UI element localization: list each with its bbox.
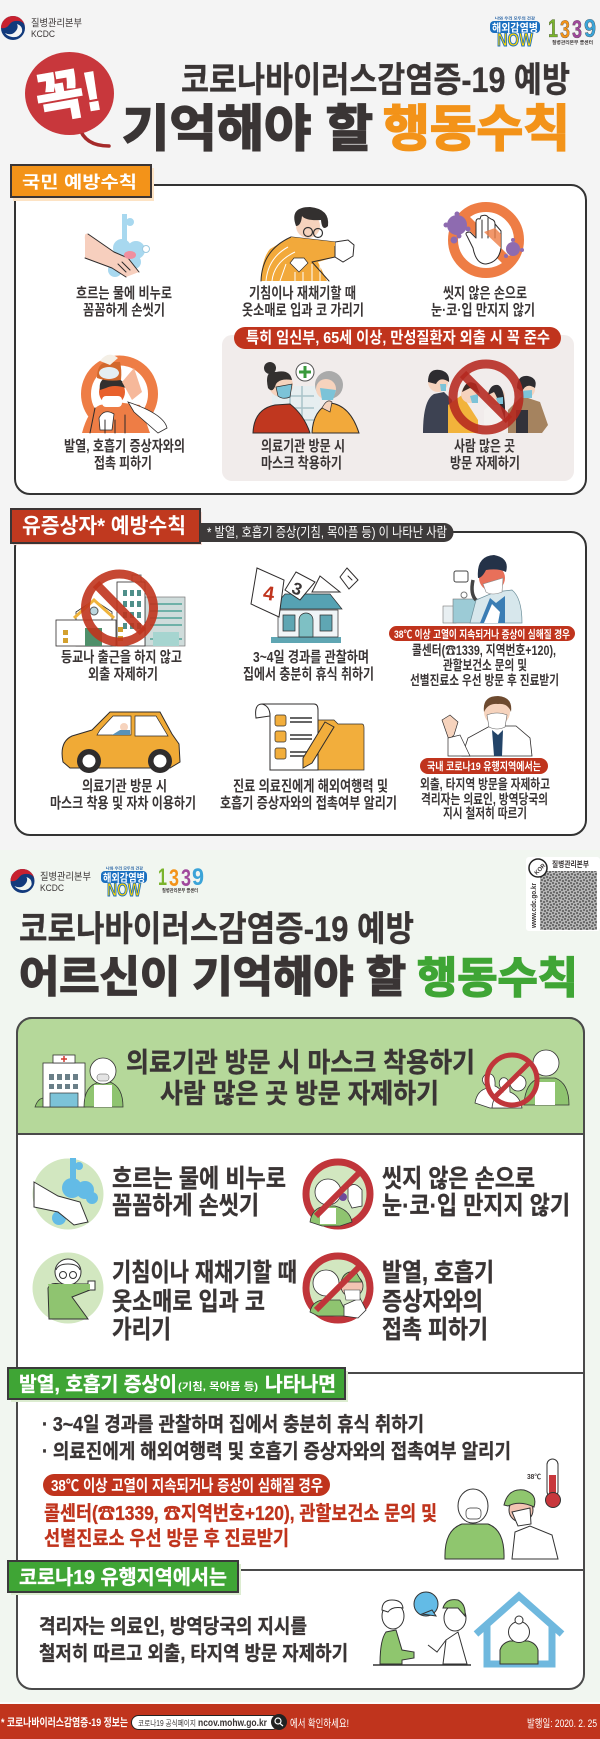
divider and heading tab: epidemic regions	[8, 1561, 584, 1595]
caption: wear mask at hospital: 의료기관 방문 시	[261, 438, 345, 455]
footer url pill	[132, 1714, 287, 1730]
panel heading tab: contacts	[11, 509, 202, 545]
icon: no crowd elderly	[475, 1050, 569, 1108]
icon: hospital and elderly woman	[35, 1055, 123, 1107]
red pill: epidemic regions	[420, 758, 548, 774]
KCDC logo lower	[10, 869, 91, 894]
1339 logo lower: 질병관리본부 콜센터	[162, 887, 198, 894]
caption: tell medical staff	[220, 778, 397, 812]
caption: mask and own car: 마스크 착용 및 자차 이용하기	[50, 795, 196, 812]
icon: calendar and house: 4	[262, 582, 277, 606]
caption: mask and own car	[50, 778, 196, 812]
caption: stay home	[61, 649, 182, 683]
1339 logo lower: 3	[169, 865, 179, 892]
QR code block: www.cdc.go.kr	[529, 883, 538, 929]
item text: avoid contact: 발열, 호흡기	[382, 1259, 494, 1287]
icon circle: no touching	[306, 1162, 370, 1226]
caption: epidemic region rules	[420, 777, 550, 821]
overseas infection NOW logo lower: 나와 우리 모두의 건강	[106, 866, 144, 870]
1339 logo lower: 1	[158, 864, 167, 891]
sub-panel: high risk groups	[222, 327, 574, 481]
item text: no touching	[382, 1165, 570, 1220]
1339 logo lower: 9	[192, 864, 204, 891]
KCDC logo lower: 질병관리본부	[40, 871, 91, 883]
bullet list: · 의료진에게 해외여행력 및 호흡기 증상자와의 접촉여부 알리기	[42, 1440, 511, 1463]
caption: epidemic region rules: 외출, 타지역 방문을 자제하고	[420, 777, 550, 792]
1339 call center logo top: 3	[560, 16, 570, 44]
caption: cover cough: 옷소매로 입과 코 가리기	[242, 302, 364, 319]
red pill: high fever: 38℃ 이상 고열이 지속되거나 증상이 심해질 경우	[51, 1477, 323, 1495]
caption: epidemic region rules: 격리자는 의료인, 방역당국의	[421, 792, 548, 807]
1339 call center logo top: 3	[572, 16, 582, 44]
overseas infection NOW logo top: NOW	[497, 30, 533, 50]
icon: crowd prohibited	[423, 364, 548, 433]
item text: avoid contact: 증상자와의	[382, 1288, 483, 1316]
icon: yellow car	[62, 712, 180, 773]
footer url pill: 코로나19 공식페이지	[138, 1718, 196, 1728]
item text: cover cough	[112, 1259, 297, 1344]
caption: stay home: 등교나 출근을 하지 않고	[61, 649, 182, 666]
caption: epidemic region rules: 지시 철저히 따르기	[443, 806, 527, 821]
overseas infection NOW logo top: 해외감염병	[492, 20, 538, 34]
red call center text: 선별진료소 우선 방문 후 진료받기	[44, 1527, 289, 1550]
caption: do not touch face	[431, 285, 535, 319]
overseas infection NOW logo top: 나와 우리 모두의 건강	[495, 16, 536, 20]
1339 logo lower	[158, 864, 204, 894]
footer check text: 에서 확인하세요!	[290, 1716, 349, 1730]
icon: doctor on phone	[443, 555, 522, 623]
caption: wash hands	[76, 285, 172, 319]
green header of panel	[17, 1018, 584, 1134]
panel heading tab: public	[11, 165, 154, 201]
red pill: epidemic regions: 국내 코로나19 유행지역에서는	[427, 759, 541, 773]
item text: no touching: 씻지 않은 손으로	[382, 1165, 535, 1193]
icon: checklist and folder	[256, 704, 364, 770]
divider and heading tab: fever symptoms	[8, 1368, 584, 1402]
caption: avoid contact	[64, 438, 185, 472]
caption: avoid crowds: 사람 많은 곳	[454, 438, 515, 455]
icon: calendar and house	[251, 568, 358, 643]
caption: wear mask at hospital	[261, 438, 345, 472]
item text: no touching: 눈·코·입 만지지 않기	[382, 1192, 570, 1220]
lower title line two: 어르신이 기억해야 할	[19, 954, 406, 1002]
red stamp badge: 꼭!	[31, 61, 106, 131]
1339 call center logo top	[548, 15, 596, 46]
red pill: high risk notice	[234, 327, 561, 349]
caption: avoid contact: 접촉 피하기	[94, 455, 152, 472]
icon: doctor in white coat	[442, 696, 532, 756]
KCDC logo top: KCDC	[31, 29, 55, 40]
title line two: 행동수칙	[383, 101, 570, 157]
note pill: symptom definition: * 발열, 호흡기 증상(기침, 목아픔 등) 이 나타난 사람	[207, 525, 447, 540]
icon: calendar and house: 3	[289, 579, 305, 600]
footer info text: * 코로나바이러스감염증-19 정보는	[1, 1715, 128, 1729]
red pill: high fever	[43, 1474, 330, 1496]
item text: cover cough: 기침이나 재채기할 때	[112, 1259, 297, 1287]
panel heading tab: public: 국민 예방수칙	[22, 173, 137, 192]
icon circle: cough into sleeve	[32, 1252, 104, 1324]
icon: do not touch with unwashed hands	[444, 207, 524, 273]
bullet list	[42, 1413, 511, 1463]
1339 call center logo top: 질병관리본부 콜센터	[552, 39, 593, 46]
caption: do not touch face: 눈·코·입 만지지 않기	[431, 302, 535, 319]
item text: avoid contact: 접촉 피하기	[382, 1316, 488, 1344]
divider and heading tab: fever symptoms: (기침, 목아픔 등)	[178, 1380, 258, 1393]
note pill: symptom definition	[200, 523, 454, 542]
caption: call center instructions: 콜센터(☎1339, 지역번호+120),	[412, 643, 556, 658]
KCDC logo top	[1, 16, 82, 40]
quarantine text: 격리자는 의료인, 방역당국의 지시를	[39, 1615, 307, 1638]
caption: avoid contact: 발열, 호흡기 증상자와의	[64, 438, 185, 455]
caption: wash hands: 흐르는 물에 비누로	[76, 285, 172, 302]
item text: avoid contact	[382, 1259, 494, 1344]
divider and heading tab: fever symptoms: 발열, 호흡기 증상이	[19, 1373, 177, 1396]
icon circle: handwashing	[32, 1158, 104, 1230]
red call center text	[44, 1502, 437, 1550]
title line two	[122, 101, 570, 157]
caption: wash hands: 꼼꼼하게 손씻기	[83, 302, 165, 319]
overseas infection NOW logo lower: 해외감염병	[103, 870, 145, 884]
caption: avoid crowds	[450, 438, 520, 472]
caption: rest at home: 3~4일 경과를 관찰하며	[253, 649, 369, 666]
icon circle: avoid contact	[306, 1256, 370, 1320]
caption: stay home: 외출 자제하기	[88, 666, 158, 683]
caption: do not touch face: 씻지 않은 손으로	[443, 285, 527, 302]
divider and heading tab: fever symptoms: 나타나면	[265, 1373, 336, 1396]
illustration: fever patient and thermometer: 38℃	[527, 1473, 541, 1481]
header text: 의료기관 방문 시 마스크 착용하기	[126, 1048, 475, 1078]
quarantine text: 철저히 따르고 외출, 타지역 방문 자제하기	[39, 1642, 348, 1665]
footer url pill: ncov.mohw.go.kr	[198, 1718, 267, 1729]
icon: hand washing	[85, 214, 150, 277]
item text: wash hands: 흐르는 물에 비누로	[112, 1165, 286, 1193]
panel: elderly rules	[8, 1018, 584, 1689]
caption: tell medical staff: 호흡기 증상자와의 접촉여부 알리기	[220, 795, 397, 812]
lower title line one: 코로나바이러스감염증-19 예방	[19, 910, 414, 949]
panel: contacts prevention rules	[11, 509, 586, 835]
caption: cover cough: 기침이나 재채기할 때	[249, 285, 356, 302]
header text	[126, 1048, 475, 1109]
caption: rest at home	[243, 649, 374, 683]
icon: masked women at hospital	[253, 362, 359, 433]
illustration: elderly at home	[476, 1596, 562, 1664]
icon: avoid contact with feverish person	[82, 355, 167, 433]
overseas infection NOW logo top	[490, 16, 540, 50]
QR code block	[526, 857, 600, 931]
QR code block: KOR	[534, 863, 548, 876]
illustration: fever patient and thermometer	[445, 1459, 560, 1559]
item text: cover cough: 가리기	[112, 1316, 171, 1344]
title line two: 기억해야 할	[122, 101, 373, 157]
1339 logo lower: 3	[181, 865, 191, 892]
lower title line two	[19, 954, 578, 1003]
overseas infection NOW logo lower: NOW	[107, 880, 141, 900]
quarantine text	[39, 1615, 348, 1665]
caption: cover cough	[242, 285, 364, 319]
caption: call center instructions: 선별진료소 우선 방문 후 진료받기	[410, 673, 559, 688]
illustration: doctor consultation	[373, 1592, 471, 1665]
overseas infection NOW logo lower	[101, 866, 147, 900]
QR code block: 질병관리본부	[552, 859, 590, 869]
lower title line two: 행동수칙	[417, 955, 578, 1003]
icon: man coughing into sleeve	[261, 207, 354, 281]
icon: stay home instead of school or work	[56, 574, 185, 646]
caption: rest at home: 집에서 충분히 휴식 취하기	[243, 666, 374, 683]
item text: wash hands: 꼼꼼하게 손씻기	[112, 1192, 259, 1220]
red pill: high risk notice: 특히 임신부, 65세 이상, 만성질환자 외출 시 꼭 준수	[246, 329, 550, 347]
1339 call center logo top: 9	[584, 15, 596, 43]
caption: wear mask at hospital: 마스크 착용하기	[261, 455, 342, 472]
divider and heading tab: epidemic regions: 코로나19 유행지역에서는	[19, 1566, 227, 1589]
bullet list: · 3~4일 경과를 관찰하며 집에서 충분히 휴식 취하기	[42, 1413, 424, 1436]
item text: cover cough: 옷소매로 입과 코	[112, 1288, 265, 1316]
panel heading tab: contacts: 유증상자* 예방수칙	[22, 515, 186, 538]
KCDC logo lower: KCDC	[40, 883, 64, 894]
caption: call center instructions: 관할보건소 문의 및	[443, 658, 527, 673]
red call center text: 콜센터(☎1339, ☎지역번호+120), 관할보건소 문의 및	[44, 1502, 437, 1525]
caption: mask and own car: 의료기관 방문 시	[82, 778, 167, 795]
1339 call center logo top: 1	[548, 15, 558, 43]
caption: call center instructions	[410, 643, 559, 688]
item text: wash hands	[112, 1165, 286, 1220]
panel: public prevention rules	[11, 165, 586, 494]
caption: avoid crowds: 방문 자제하기	[450, 455, 520, 472]
red stamp badge	[25, 52, 114, 146]
header text: 사람 많은 곳 방문 자제하기	[160, 1079, 439, 1109]
footer bar	[0, 1702, 600, 1739]
caption: tell medical staff: 진료 의료진에게 해외여행력 및	[233, 778, 388, 795]
KCDC logo top: 질병관리본부	[31, 18, 82, 30]
